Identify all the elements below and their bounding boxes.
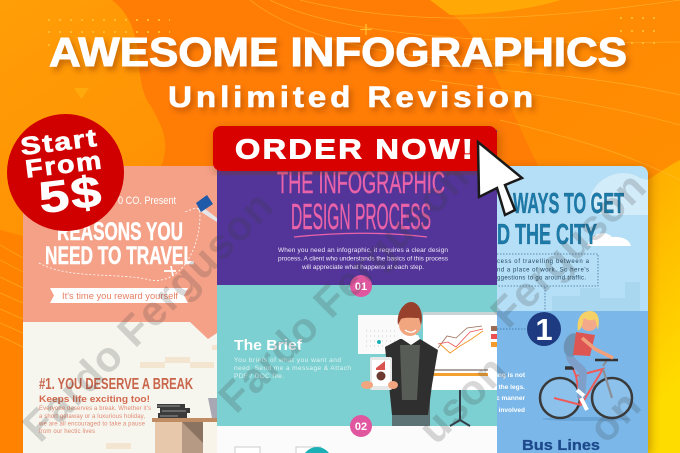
heading: ways to get: D THE CITY bbox=[497, 219, 597, 251]
body text: we are all encouraged to take a pause bbox=[38, 422, 146, 428]
skyline bbox=[552, 282, 640, 311]
clouds bbox=[590, 173, 648, 215]
illustration: presenter and board bbox=[358, 302, 497, 426]
icon: cursor arrow bbox=[478, 142, 522, 215]
icon: plane bbox=[164, 266, 176, 276]
intro text: When you need an infographic, it requires a clear design bbox=[278, 247, 448, 254]
intro text: will appreciate what happens at each step. bbox=[301, 264, 424, 271]
dashed text box: ggestions to go around traffic. bbox=[497, 276, 586, 282]
heading: reasons: NEED TO TRAVEL bbox=[45, 242, 194, 270]
badge 02: 02 bbox=[355, 421, 367, 433]
lower blue band bbox=[497, 311, 648, 453]
watermark: Fardo Ferguson bbox=[13, 181, 282, 450]
watermark: Fardo Ferguson bbox=[209, 152, 478, 421]
watermark: uson bbox=[409, 345, 516, 452]
dashed text box: nd a place of work. So here's bbox=[497, 268, 589, 274]
number one badge: 1 bbox=[535, 312, 553, 347]
price text: Start bbox=[19, 124, 100, 161]
intro text bbox=[278, 247, 449, 271]
intro text: process. A client who understands the basics of this process bbox=[278, 256, 449, 262]
heading: you deserve a break: #1. YOU DESERVE A BREAK bbox=[39, 376, 194, 393]
heading: the infographic: THE INFOGRAPHIC bbox=[277, 165, 445, 200]
body text: the legs. bbox=[499, 384, 525, 391]
heading: reasons: REASONS YOU bbox=[57, 218, 183, 246]
price badge bbox=[7, 114, 124, 231]
body text: s involved bbox=[493, 407, 525, 414]
body text: Everyone deserves a break. Whether it's bbox=[39, 406, 151, 412]
panel: left travel infographic bbox=[23, 166, 217, 453]
badge 01 bbox=[350, 275, 372, 297]
present line: 0 CO. Present bbox=[118, 195, 176, 207]
number one badge bbox=[527, 312, 561, 347]
brief text: need. Send me a message & Attach bbox=[234, 365, 351, 372]
panel: right transport infographic bbox=[493, 166, 648, 453]
subheading: Keeps life exciting too! bbox=[39, 394, 150, 405]
panel: centre design process infographic: DESIGN PROCESS bbox=[291, 196, 431, 237]
next section icons bbox=[235, 447, 329, 453]
brief text: You briefs of what you want and bbox=[234, 357, 341, 364]
banner: It's time you reward yourself bbox=[62, 291, 179, 301]
button label: ORDER NOW! bbox=[235, 134, 475, 164]
title: AWESOME INFOGRAPHICS bbox=[49, 29, 627, 75]
watermark: Ferguson bbox=[481, 162, 655, 336]
body text bbox=[497, 372, 525, 412]
heading: reasons bbox=[46, 222, 194, 264]
body text: a short getaway or a luxurious holiday, bbox=[39, 414, 145, 420]
heading: ways to get bbox=[498, 192, 624, 244]
panel: centre design process infographic bbox=[217, 130, 497, 453]
underline bbox=[294, 233, 427, 237]
watermark: on bbox=[579, 380, 650, 451]
dashed flight path bbox=[39, 208, 200, 280]
price text bbox=[19, 124, 110, 225]
icon: pen bbox=[196, 195, 217, 222]
heading: the brief: The Brief bbox=[234, 337, 303, 354]
banner bbox=[50, 288, 188, 303]
badge 01: 01 bbox=[355, 281, 367, 293]
dashed text box: cess of travelling between a bbox=[497, 259, 590, 265]
body text bbox=[38, 406, 151, 435]
brief text: PDF / DOC file. bbox=[234, 373, 284, 380]
body text: c manner bbox=[496, 395, 525, 402]
price text: From bbox=[24, 146, 105, 184]
body text: from our hectic lives bbox=[39, 429, 95, 435]
brief text bbox=[234, 358, 351, 378]
dashed text box bbox=[497, 254, 598, 286]
decorative bricks bbox=[106, 345, 217, 449]
body text: ing is not bbox=[496, 372, 526, 379]
illustration: desk with books bbox=[152, 398, 217, 453]
subtitle: Unlimited Revision bbox=[168, 81, 537, 114]
price text: 5$ bbox=[36, 167, 106, 223]
badge 02 bbox=[350, 415, 372, 437]
order now button bbox=[213, 126, 497, 171]
illustration: cyclist bbox=[540, 311, 632, 421]
watermark bbox=[13, 152, 655, 452]
